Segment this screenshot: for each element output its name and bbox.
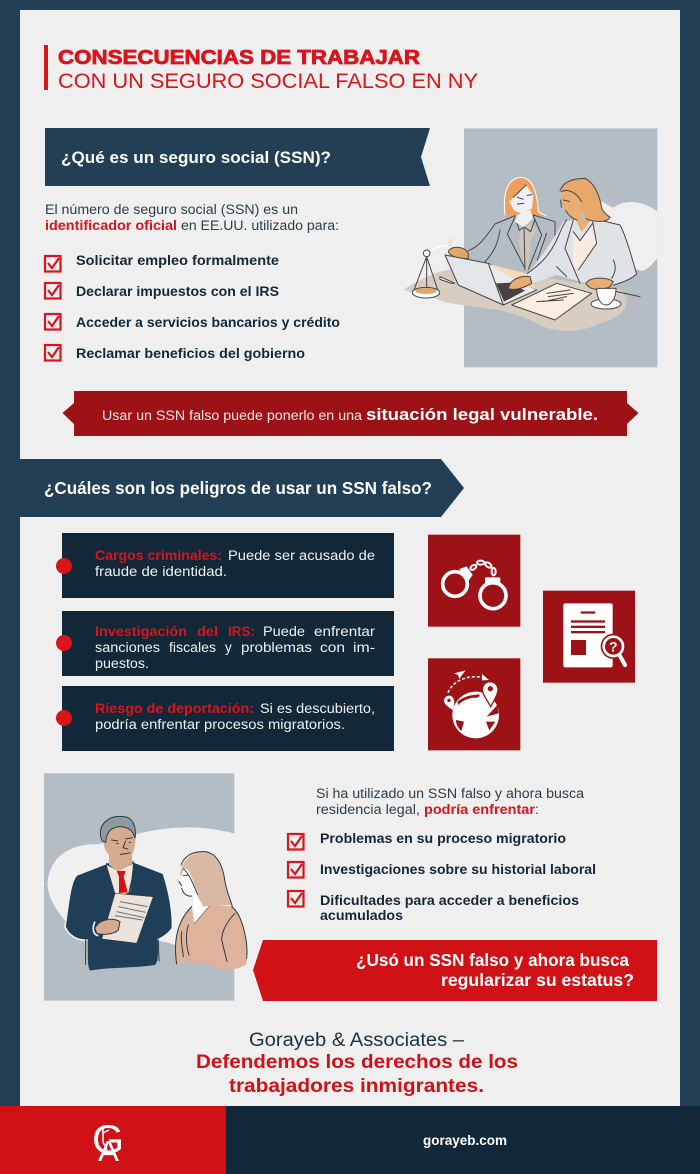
card: deportation risk: Si es descubierto, [260, 701, 375, 716]
card: IRS investigation: puestos. [95, 656, 149, 671]
closing statement [196, 1030, 518, 1097]
card: criminal charges: Puede ser acusado de [228, 548, 375, 563]
card: IRS investigation: fiscales [169, 640, 216, 655]
title: CON UN SEGURO SOCIAL FALSO EN NY [58, 69, 478, 93]
card: IRS investigation: del [197, 624, 218, 639]
card: IRS investigation: im- [353, 640, 375, 655]
residency intro text: residencia legal, [316, 802, 420, 817]
heading ribbon: dangers [20, 459, 464, 517]
card: IRS investigation [56, 611, 394, 676]
residency intro text: : [535, 802, 539, 817]
consequence item 3: acumulados [320, 908, 403, 923]
card: IRS investigation: Investigación [95, 624, 187, 639]
checklist item 1 [45, 253, 280, 272]
heading ribbon: dangers: ¿Cuáles son los peligros de usar un SSN falso? [44, 478, 432, 498]
card: IRS investigation: Puede [263, 624, 305, 639]
warning banner: situación legal vulnerable. [366, 405, 598, 424]
closing statement: trabajadores inmigrantes. [229, 1076, 484, 1097]
title [44, 45, 478, 93]
intro text: en EE.UU. utilizado para: [181, 218, 339, 233]
call to action: regularizar su estatus? [441, 970, 634, 990]
residency intro text: podría enfrentar [424, 802, 536, 817]
residency intro text: Si ha utilizado un SSN falso y ahora busca [316, 786, 585, 801]
heading ribbon: what is SSN [45, 128, 430, 186]
call to action: ¿Usó un SSN falso y ahora busca [356, 950, 629, 970]
card: IRS investigation: enfrentar [314, 624, 376, 639]
call to action [253, 940, 657, 1001]
card: criminal charges: Cargos criminales: [95, 548, 222, 563]
checklist item 2: Declarar impuestos con el IRS [76, 284, 279, 299]
illustration: two women at a desk [403, 128, 657, 367]
card: IRS investigation: IRS: [228, 624, 255, 639]
warning banner [62, 391, 638, 436]
icon: handcuffs [428, 535, 520, 627]
card: IRS investigation: con [320, 640, 345, 655]
residency intro text [316, 786, 585, 817]
checklist item 3: Acceder a servicios bancarios y crédito [76, 315, 340, 330]
footer [0, 1106, 700, 1174]
heading ribbon: what is SSN: ¿Qué es un seguro social (SSN)? [61, 148, 331, 167]
intro text [45, 202, 339, 233]
intro text: identificador oficial [45, 218, 177, 233]
checklist: consequences [288, 831, 596, 923]
card: deportation risk [56, 686, 394, 751]
checklist item 1: Solicitar empleo formalmente [76, 253, 280, 268]
illustration: attorney with client [44, 773, 250, 1001]
title: CONSECUENCIAS DE TRABAJAR [58, 46, 420, 69]
card: criminal charges: fraude de identidad. [95, 564, 227, 579]
intro text: El número de seguro social (SSN) es un [45, 202, 298, 217]
website: gorayeb.com [423, 1133, 507, 1148]
closing statement: Gorayeb & Associates – [249, 1030, 464, 1051]
consequence item 3: Dificultades para acceder a beneficios [320, 893, 579, 908]
card: IRS investigation: y [225, 640, 232, 655]
consequence item 3 [288, 891, 579, 923]
icon: document under magnifier [543, 591, 635, 683]
card: deportation risk: podría enfrentar procesos migratorios. [95, 717, 345, 732]
warning banner: Usar un SSN falso puede ponerlo en una [102, 408, 363, 423]
consequence item 1 [288, 831, 566, 850]
card: IRS investigation: sanciones [95, 640, 160, 655]
consequence item 2: Investigaciones sobre su historial laboral [320, 862, 596, 877]
checklist: uses of SSN [45, 253, 340, 361]
checklist item 4: Reclamar beneficios del gobierno [76, 346, 305, 361]
logo: A [98, 1136, 120, 1168]
logo: G [92, 1118, 124, 1162]
card: deportation risk: Riesgo de deportación: [95, 701, 254, 716]
card: criminal charges [56, 533, 394, 598]
consequence item 1: Problemas en su proceso migratorio [320, 831, 566, 846]
closing statement: Defendemos los derechos de los [196, 1052, 518, 1073]
card: IRS investigation: problemas [241, 640, 312, 655]
icon: document under magnifier: ? [609, 638, 618, 654]
icon: globe with route pins [428, 658, 520, 750]
